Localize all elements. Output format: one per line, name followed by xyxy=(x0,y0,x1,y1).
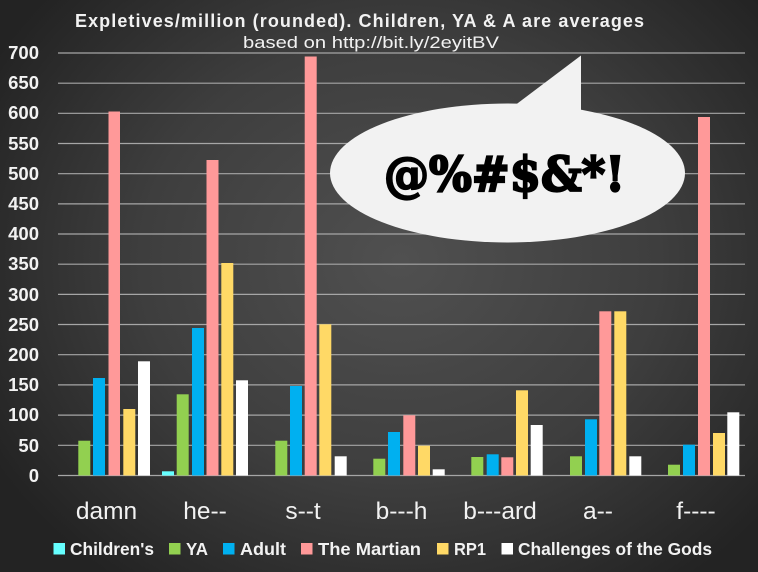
bar group: f---- xyxy=(668,117,739,476)
y axis labels: 450 xyxy=(8,193,39,214)
y axis labels: 400 xyxy=(8,223,39,244)
bubble text: @%#$&*! xyxy=(384,147,625,203)
legend: YA xyxy=(169,539,208,559)
y axis labels: 550 xyxy=(8,133,39,154)
legend xyxy=(54,539,712,559)
y axis labels: 700 xyxy=(8,42,39,63)
legend: YA: YA xyxy=(186,539,208,559)
category labels: damn xyxy=(76,498,137,525)
y axis labels: 0 xyxy=(29,465,39,486)
y axis labels: 600 xyxy=(8,102,39,123)
legend: RP1: RP1 xyxy=(454,539,486,559)
category labels: a-- xyxy=(583,498,613,525)
legend: Adult: Adult xyxy=(240,539,286,559)
y axis labels: 50 xyxy=(18,435,39,456)
y axis labels xyxy=(8,42,39,486)
y axis labels: 350 xyxy=(8,253,39,274)
title: Expletives/million (rounded). Children, YA & A are averages xyxy=(75,11,644,31)
y axis labels: 500 xyxy=(8,163,39,184)
bar group: b---h xyxy=(373,415,445,476)
category labels: b---h xyxy=(376,498,427,525)
legend: The Martian: The Martian xyxy=(318,539,421,559)
bubble shape xyxy=(330,56,685,242)
bar group: he-- xyxy=(162,160,248,476)
legend: Children's: Children's xyxy=(70,539,154,559)
y axis labels: 650 xyxy=(8,72,39,93)
y axis labels: 300 xyxy=(8,284,39,305)
category labels: s--t xyxy=(285,498,321,525)
y axis labels: 100 xyxy=(8,404,39,425)
category labels: b---ard xyxy=(463,498,537,525)
subtitle: based on http://bit.ly/2eyitBV xyxy=(243,33,500,52)
speech bubble callout xyxy=(330,56,685,242)
category labels: he-- xyxy=(183,498,227,525)
bar group: damn xyxy=(78,112,150,476)
bar group: s--t xyxy=(275,56,347,476)
bar group: b---ard xyxy=(471,390,543,476)
y axis labels: 150 xyxy=(8,374,39,395)
legend: Challenges of the Gods: Challenges of the Gods xyxy=(518,539,712,559)
y axis labels: 200 xyxy=(8,344,39,365)
legend: RP1 xyxy=(437,539,486,559)
bar group: a-- xyxy=(570,311,641,476)
category labels xyxy=(76,498,716,525)
category labels: f---- xyxy=(676,498,716,525)
y axis labels: 250 xyxy=(8,314,39,335)
